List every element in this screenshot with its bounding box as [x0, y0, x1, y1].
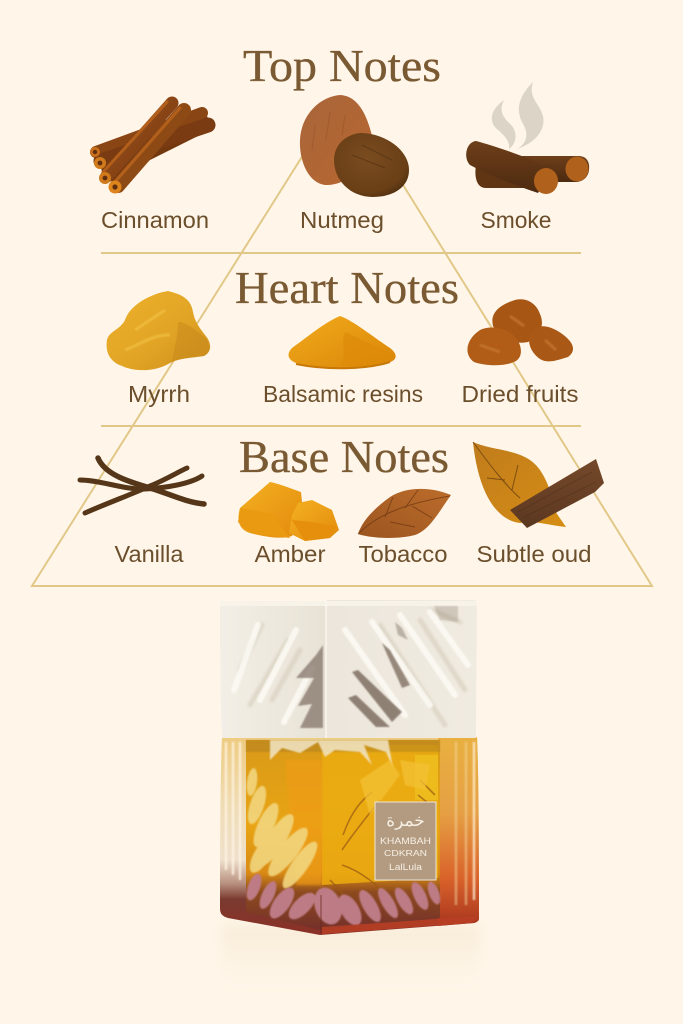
- label: Vanilla: Vanilla: [114, 541, 184, 567]
- label: Dried fruits: Dried fruits: [462, 381, 578, 407]
- label: Balsamic resins: Balsamic resins: [263, 381, 423, 407]
- bottle cap: [220, 600, 477, 738]
- section: heart notes: [107, 262, 579, 407]
- perfume bottle: [220, 600, 480, 1005]
- icon: smoke and logs: [466, 82, 589, 194]
- side flutes: [226, 742, 474, 905]
- bottle label: CDKRAN: [384, 848, 427, 858]
- heading: Base Notes: Base Notes: [239, 431, 449, 482]
- section: base notes: [80, 431, 604, 567]
- icon: vanilla pods: [80, 458, 204, 513]
- liquid: [246, 740, 440, 930]
- icon: leaf and oud wood: [473, 442, 604, 528]
- section: top notes: [90, 40, 589, 233]
- crystal relief: pink lower strokes: [244, 872, 443, 929]
- icon: nutmeg: [300, 95, 409, 197]
- cap dark reflections: [296, 606, 458, 728]
- cap highlights: [234, 612, 468, 722]
- label: Tobacco: Tobacco: [358, 541, 448, 567]
- pyramid outline: [32, 152, 652, 586]
- bottle label: خمرة: [386, 811, 425, 831]
- icon: amber cubes: [238, 482, 339, 541]
- bottle label: KHAMBAH: [380, 836, 431, 846]
- bottle label: [375, 802, 436, 880]
- heading: Top Notes: Top Notes: [243, 40, 441, 91]
- label: Amber: Amber: [254, 541, 326, 567]
- crystal relief: top ridge: [270, 740, 393, 768]
- bottle label: LalLula: [389, 862, 423, 873]
- cap grey texture: [240, 610, 465, 725]
- label: Myrrh: Myrrh: [128, 381, 190, 407]
- icon: dried fruits: [467, 299, 573, 365]
- bottle body: [220, 737, 479, 935]
- bottle shadow: [222, 925, 480, 1005]
- heading: Heart Notes: Heart Notes: [235, 262, 459, 313]
- crystal relief: dark leaf strokes: [330, 780, 435, 915]
- icon: tobacco leaf: [358, 489, 451, 538]
- crystal relief: pale fan strokes: [244, 767, 323, 893]
- icon: cinnamon: [90, 102, 214, 194]
- label: Subtle oud: Subtle oud: [476, 541, 592, 567]
- label: Smoke: Smoke: [480, 207, 552, 233]
- icon: myrrh: [107, 291, 210, 370]
- label: Cinnamon: Cinnamon: [101, 207, 209, 233]
- icon: balsamic resin pile: [289, 316, 396, 368]
- label: Nutmeg: Nutmeg: [300, 207, 384, 233]
